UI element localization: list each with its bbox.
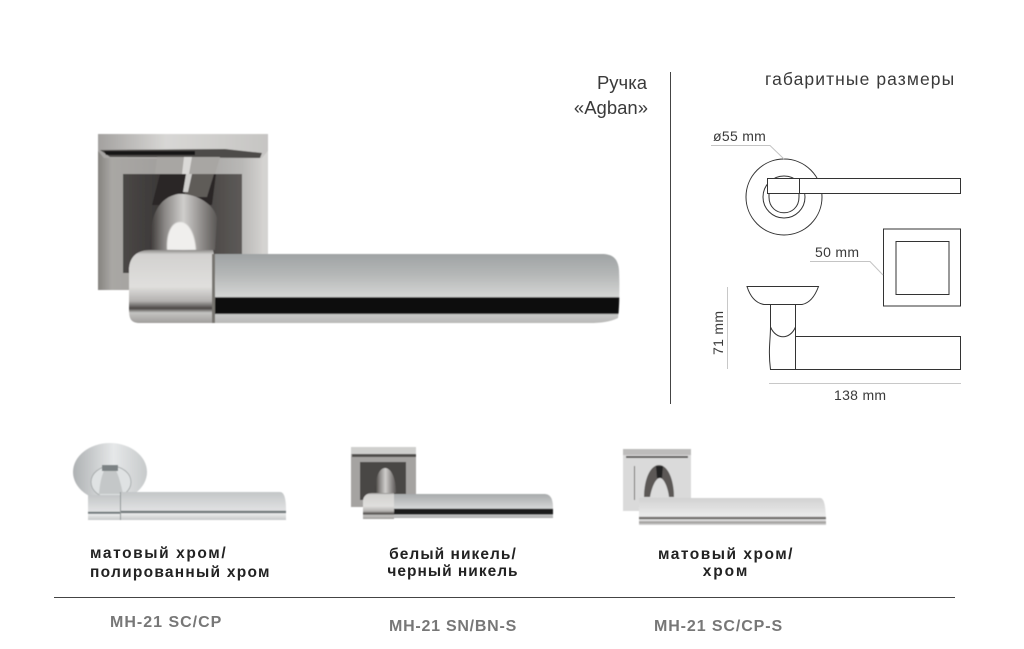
label: diameter 55 mm: [711, 128, 784, 159]
caption: finish 1: полированный хром: [90, 564, 271, 581]
title: product name: Ручка: [597, 72, 648, 93]
neck U: [769, 190, 799, 213]
rose cup: [747, 286, 818, 304]
lever outline: [768, 178, 960, 194]
title: product name: «Agban»: [574, 97, 648, 118]
label: 71 mm: [710, 287, 728, 369]
neck: [150, 157, 220, 250]
technical drawing: top view: [746, 159, 960, 235]
caption: finish 1: [90, 545, 271, 581]
grip block: [129, 250, 215, 323]
label: diameter 55 mm: ø55 mm: [713, 128, 766, 144]
rose circle: [746, 159, 822, 235]
vertical divider: [670, 72, 671, 404]
technical drawing: side view: [747, 286, 960, 370]
main product photo: square-rose handle: [98, 134, 619, 323]
inner dark square: [123, 174, 242, 273]
heading: overall dimensions: габаритные размеры: [765, 69, 955, 89]
label: 71 mm: 71 mm: [710, 311, 726, 355]
label: 50 mm: [810, 244, 883, 275]
grip divider: [798, 178, 800, 194]
label: 50 mm: 50 mm: [815, 244, 859, 260]
caption: finish 3: [658, 546, 794, 580]
product 3 photo: square rose, chrome: [623, 449, 826, 525]
caption: finish 2: черный никель: [387, 563, 519, 580]
product 1 photo: round rose: [73, 443, 286, 520]
lever bar: [214, 254, 619, 323]
caption: finish 3: матовый хром/: [658, 546, 794, 563]
model code 3: MH-21 SC/CP-S: [654, 618, 783, 635]
technical drawing: square rose: [884, 229, 960, 306]
product 2 photo: square rose, nickel: [351, 447, 553, 519]
lever side outline: [796, 336, 960, 370]
rose plate: [98, 134, 268, 290]
neck and grip: [769, 304, 796, 370]
caption: finish 2: белый никель/: [389, 546, 517, 563]
caption: finish 2: [387, 546, 519, 580]
model code 2: MH-21 SN/BN-S: [389, 618, 517, 635]
title: product name: [574, 72, 648, 118]
inner circle: [763, 176, 805, 218]
label: 138 mm: 138 mm: [834, 387, 886, 403]
caption: finish 3: хром: [703, 563, 749, 580]
caption: finish 1: матовый хром/: [90, 545, 227, 562]
horizontal divider: [54, 597, 955, 598]
model code 1: MH-21 SC/CP: [110, 614, 222, 631]
